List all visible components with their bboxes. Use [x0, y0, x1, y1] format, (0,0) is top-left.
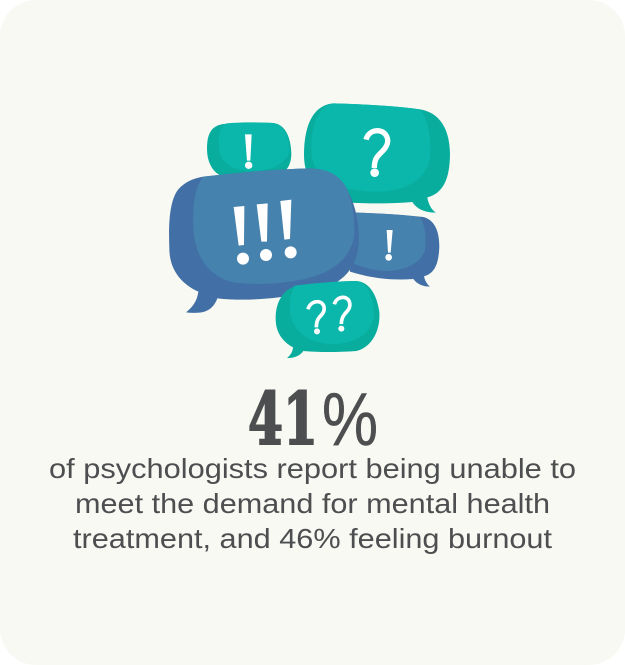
icon: large teal bubble with question mark [304, 103, 450, 213]
icon: speech bubbles illustration [169, 103, 450, 358]
text block: description: meet the demand for mental health [75, 488, 550, 519]
text block: description: of psychologists report being unable to [49, 453, 576, 484]
icon: large blue bubble with exclamations [169, 168, 359, 313]
text block: description [49, 453, 576, 554]
icon: small teal bubble with exclamation [207, 122, 291, 177]
heading: 41% statistic: 41 [248, 376, 318, 461]
text block: description: treatment, and 46% feeling burnout [73, 523, 552, 554]
icon: medium blue bubble with exclamation [347, 212, 439, 287]
heading: 41% statistic: % [322, 377, 378, 461]
icon: lower teal bubble with question marks [276, 281, 379, 358]
